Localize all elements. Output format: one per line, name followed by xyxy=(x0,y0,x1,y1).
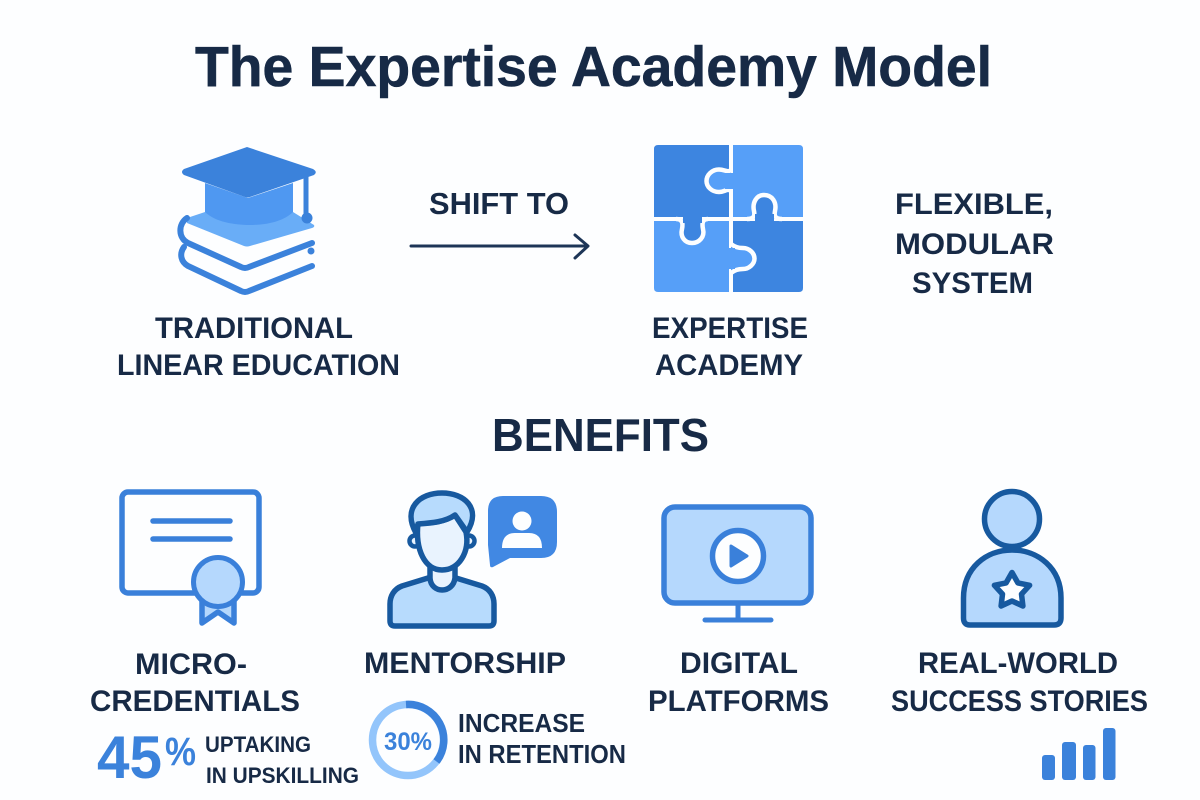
bar chart xyxy=(1042,728,1116,780)
label: real-world success stories xyxy=(891,647,1148,718)
label: flexible modular system: MODULAR xyxy=(895,228,1054,261)
icon: mentor with speech bubble xyxy=(390,493,557,626)
label: flexible modular system xyxy=(895,188,1054,300)
stat: 45% uptaking in upskilling: % xyxy=(165,730,196,774)
label: micro-credentials xyxy=(90,648,300,718)
icon: monitor with play button xyxy=(664,507,811,620)
icon: certificate xyxy=(122,492,259,623)
label: shift to: SHIFT TO xyxy=(429,186,569,221)
donut chart: 30%: 30% xyxy=(384,728,432,756)
stat: 30% increase in retention xyxy=(372,704,626,776)
panel: mentorship xyxy=(364,493,626,776)
label: traditional linear education xyxy=(117,312,400,382)
label: real-world success stories: REAL-WORLD xyxy=(918,647,1118,680)
label: digital platforms: PLATFORMS xyxy=(648,685,829,718)
label: flexible modular system: SYSTEM xyxy=(912,267,1033,300)
panel: digital platforms xyxy=(648,507,829,718)
label: expertise academy xyxy=(652,312,808,382)
stat: 45% uptaking in upskilling xyxy=(97,724,359,791)
label: real-world success stories: SUCCESS STORIES xyxy=(891,685,1148,718)
label: traditional linear education: LINEAR EDUCATION xyxy=(117,349,400,382)
label: micro-credentials: CREDENTIALS xyxy=(90,685,300,718)
panel: real-world success stories xyxy=(891,492,1148,780)
stat: 45% uptaking in upskilling: 45 xyxy=(97,724,162,791)
arrow: shift to expertise academy xyxy=(411,235,588,258)
label: digital platforms: DIGITAL xyxy=(680,647,798,680)
panel: traditional linear education xyxy=(117,147,400,382)
label: expertise academy: ACADEMY xyxy=(655,349,803,382)
label: micro-credentials: MICRO- xyxy=(135,648,247,681)
icon: person with star xyxy=(964,492,1061,625)
stat: 45% uptaking in upskilling: IN UPSKILLING xyxy=(206,763,359,788)
panel: expertise academy xyxy=(652,145,808,382)
label: expertise academy: EXPERTISE xyxy=(652,312,808,345)
label: digital platforms xyxy=(648,647,829,718)
stat: 45% uptaking in upskilling: UPTAKING xyxy=(205,732,311,757)
donut chart: 30% xyxy=(372,704,444,776)
heading: benefits: BENEFITS xyxy=(492,409,709,461)
icon: graduation cap on books xyxy=(180,147,316,292)
stat: 30% increase in retention: INCREASE xyxy=(458,708,585,738)
icon: puzzle xyxy=(654,145,803,292)
label: traditional linear education: TRADITIONAL xyxy=(155,312,353,345)
label: mentorship: MENTORSHIP xyxy=(364,647,566,680)
title: The Expertise Academy Model xyxy=(195,35,992,99)
panel: micro-credentials xyxy=(90,492,359,791)
label: flexible modular system: FLEXIBLE, xyxy=(895,188,1053,221)
stat: 30% increase in retention: IN RETENTION xyxy=(458,739,626,769)
